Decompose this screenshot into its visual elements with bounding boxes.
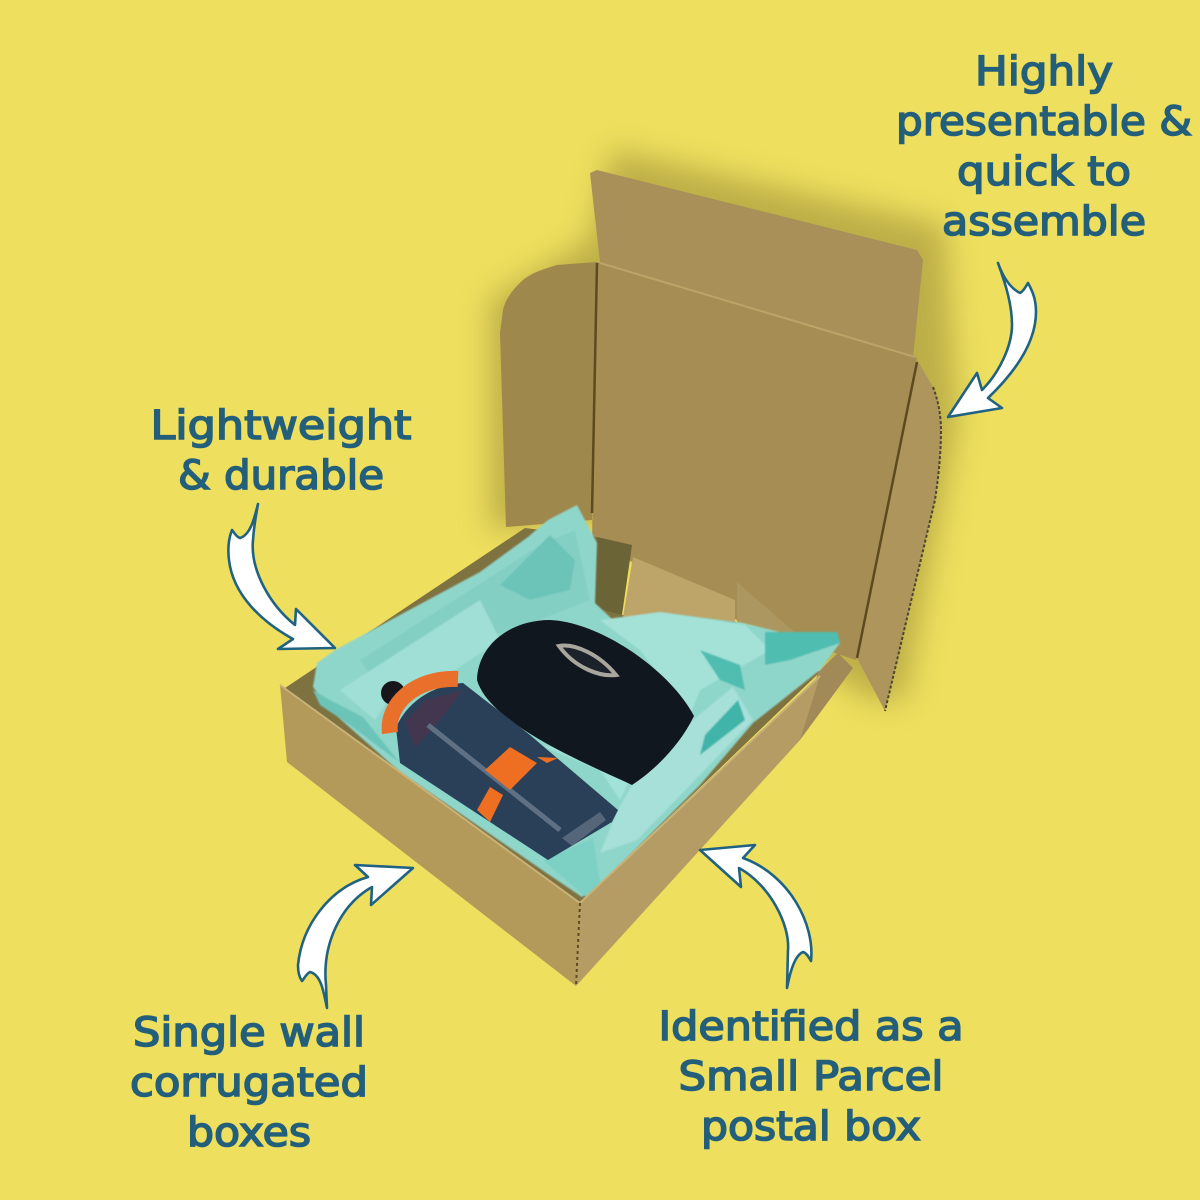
- front right wall: [576, 676, 820, 986]
- illustration: open cardboard box: [280, 170, 941, 986]
- icon: sports bottle: [381, 679, 618, 860]
- arrow: small parcel: [700, 845, 811, 988]
- text: highly presentable: Highly: [975, 49, 1113, 95]
- text: highly presentable: quick to: [957, 149, 1131, 195]
- text: identified as small parcel: postal box: [701, 1104, 921, 1150]
- arrow: lightweight: [228, 504, 335, 649]
- front left wall: [280, 685, 580, 986]
- text: highly presentable: presentable &: [896, 99, 1192, 145]
- text: highly presentable: assemble: [942, 199, 1146, 245]
- tissue paper: [313, 505, 840, 898]
- text: single wall corrugated boxes: Single wall: [133, 1010, 365, 1056]
- arrow: single wall: [298, 865, 413, 1008]
- icon: black glasses case: [477, 620, 694, 785]
- inner box floor: [623, 557, 735, 622]
- text: lightweight and durable: Lightweight: [150, 403, 412, 449]
- text: single wall corrugated boxes: corrugated: [130, 1060, 368, 1106]
- text: identified as small parcel: Identified as a: [658, 1004, 964, 1050]
- text: lightweight and durable: [150, 403, 412, 499]
- text: identified as small parcel: [658, 1004, 964, 1150]
- right side flap of lid: [857, 360, 941, 711]
- arrow: to lid: [948, 263, 1036, 417]
- text: lightweight and durable: & durable: [178, 453, 384, 499]
- lid shadow: [490, 150, 958, 700]
- text: single wall corrugated boxes: boxes: [187, 1110, 311, 1156]
- text: highly presentable: [896, 49, 1192, 245]
- inner box base: [285, 528, 820, 903]
- text: single wall corrugated boxes: [130, 1010, 368, 1156]
- left side flap of lid: [500, 262, 597, 527]
- dark inner box flap: [593, 537, 632, 615]
- inner lid panel: [592, 262, 917, 660]
- top flap of lid: [590, 170, 923, 358]
- inner triangle flap: [737, 582, 800, 637]
- outer corner flap: [800, 653, 853, 740]
- text: identified as small parcel: Small Parcel: [678, 1054, 944, 1100]
